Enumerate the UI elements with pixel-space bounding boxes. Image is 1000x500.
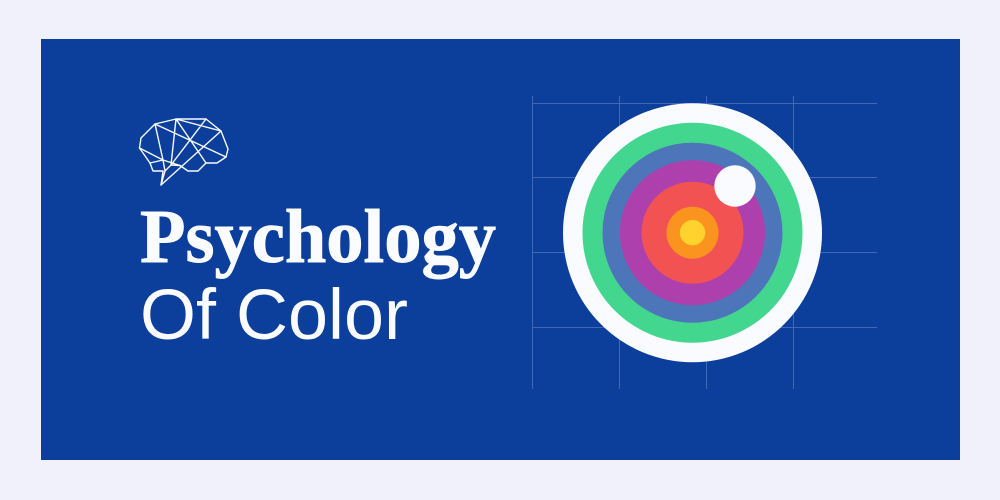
subtitle: Of Color: Of Color [140, 276, 408, 355]
title: Psychology: Psychology [140, 195, 496, 279]
panel: blue banner [41, 39, 960, 460]
icon: polygon brain [140, 119, 228, 185]
grid lines [532, 96, 877, 389]
small white dot [714, 165, 756, 207]
chart: concentric colour circles [563, 103, 822, 362]
